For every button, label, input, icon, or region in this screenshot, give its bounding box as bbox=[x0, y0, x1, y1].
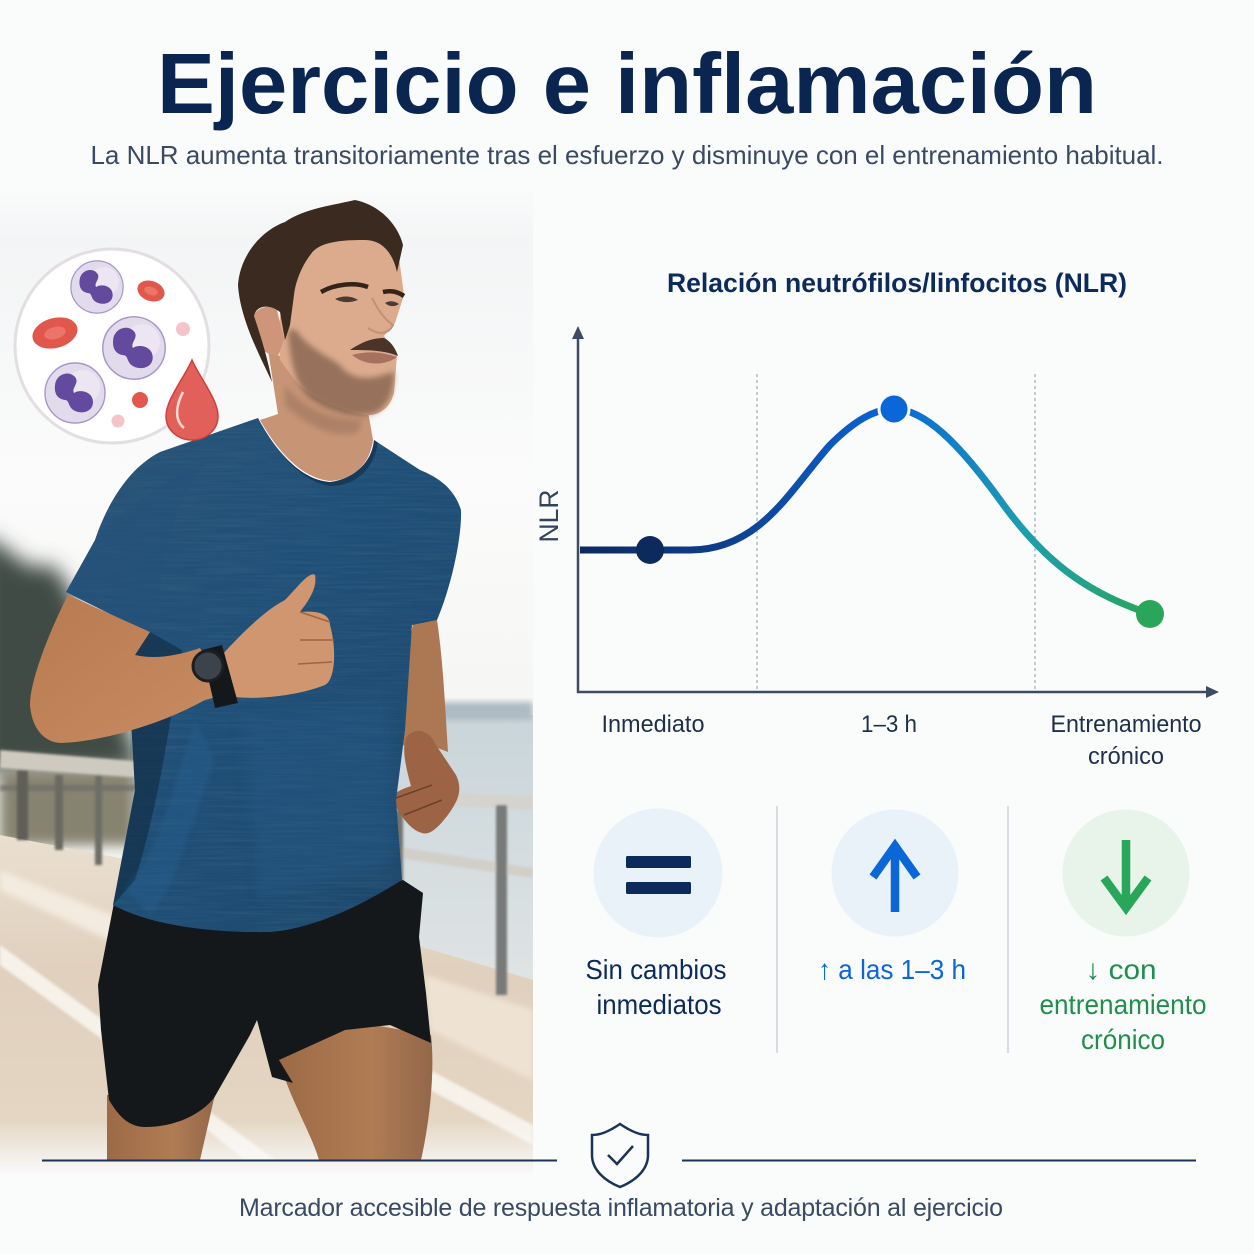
red blood cell 2 bbox=[29, 313, 81, 353]
runner shorts bbox=[98, 880, 431, 1127]
blood drop bbox=[166, 360, 218, 440]
label: ↓ con bbox=[1086, 954, 1156, 985]
panel: no immediate changes bbox=[586, 808, 726, 1020]
label: ↑ a las 1–3 h bbox=[818, 954, 966, 985]
stubble beard bbox=[288, 330, 394, 415]
point: immediate bbox=[636, 536, 664, 564]
hair bbox=[238, 200, 403, 382]
icon: shield check bbox=[592, 1124, 648, 1187]
panel: rises at 1–3 h bbox=[818, 810, 966, 985]
y axis label: NLR bbox=[534, 490, 564, 542]
title: Ejercicio e inflamación bbox=[157, 37, 1097, 132]
panel: falls with chronic training bbox=[1040, 810, 1206, 1055]
circle backdrop bbox=[15, 249, 209, 443]
summary dividers bbox=[777, 806, 1008, 1053]
watch bbox=[193, 645, 238, 708]
neck stubble bbox=[285, 385, 362, 434]
red blood cell 1 bbox=[134, 277, 168, 305]
x label: chronic training: Entrenamiento bbox=[1050, 711, 1202, 738]
runner hand bbox=[222, 574, 334, 698]
x label: immediate: Inmediato bbox=[602, 711, 704, 738]
label: Sin cambios bbox=[586, 954, 726, 985]
runner head bbox=[238, 200, 404, 415]
x axis bbox=[577, 686, 1219, 698]
runner far arm and hand bbox=[392, 620, 459, 834]
x label: 1–3 h: 1–3 h bbox=[861, 711, 917, 738]
runner neck bbox=[260, 350, 373, 481]
label: crónico bbox=[1081, 1024, 1165, 1055]
runner shirt bbox=[66, 418, 461, 932]
label: inmediatos bbox=[596, 989, 722, 1020]
point: chronic bbox=[1136, 600, 1164, 628]
white blood cell 3 bbox=[45, 363, 105, 423]
mouth and moustache bbox=[350, 338, 398, 356]
point: peak bbox=[879, 394, 909, 424]
runner near arm bbox=[30, 595, 225, 743]
label: entrenamiento bbox=[1040, 989, 1206, 1020]
footer rule bbox=[42, 1160, 1196, 1162]
icon: down arrow bbox=[1062, 810, 1190, 936]
photo: runner bbox=[30, 200, 465, 1160]
curve bbox=[580, 409, 1150, 614]
icon: equals bbox=[594, 808, 722, 938]
ear bbox=[251, 307, 284, 356]
white blood cell 1 bbox=[71, 261, 123, 313]
nose shade bbox=[368, 298, 393, 333]
x label: chronic training: crónico bbox=[1088, 743, 1164, 770]
footer text: Marcador accesible de respuesta inflamatoria y adaptación al ejercicio bbox=[239, 1194, 1003, 1222]
face bbox=[278, 228, 404, 415]
runner legs bbox=[107, 1020, 432, 1160]
icon: up arrow bbox=[832, 810, 958, 936]
photo background scene bbox=[0, 524, 533, 1167]
white blood cell 2 bbox=[103, 317, 165, 379]
line chart: NLR over time bbox=[534, 326, 1219, 770]
icon: blood cells circle bbox=[15, 249, 218, 443]
platelet dots bbox=[112, 322, 190, 428]
y axis bbox=[572, 326, 584, 693]
subtitle: La NLR aumenta transitoriamente tras el esfuerzo y disminuye con el entrenamiento habitual. bbox=[90, 140, 1164, 170]
eyebrows and eyes bbox=[321, 284, 404, 296]
shirt shading bbox=[60, 415, 465, 935]
dashed time dividers bbox=[757, 374, 1035, 690]
chart heading: Relación neutrófilos/linfocitos (NLR) bbox=[667, 268, 1127, 298]
